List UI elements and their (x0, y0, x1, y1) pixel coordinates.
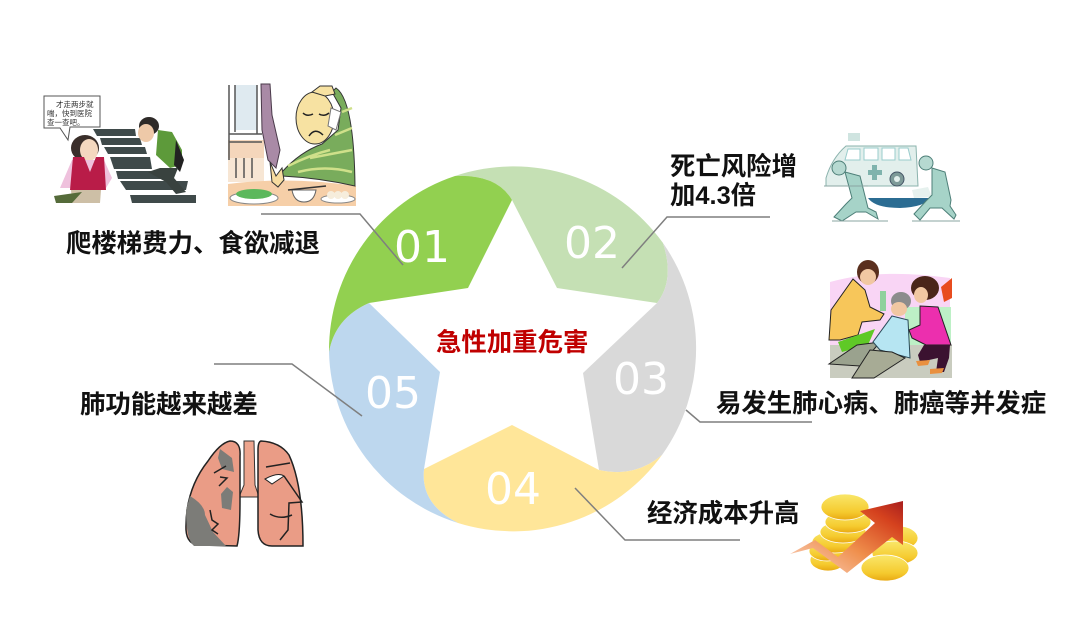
label 04: 经济成本升高 (647, 500, 799, 528)
leader line 05 (214, 364, 362, 416)
curtain (261, 84, 280, 168)
panel: star ring diagram (329, 166, 696, 531)
segment 01 green (329, 176, 512, 352)
segment 03 grey (583, 243, 696, 472)
leader line 01 (261, 214, 403, 265)
icon: woman and man on stairs (44, 96, 196, 203)
right medic (914, 168, 956, 220)
speech bubble: 查一查吧。 (47, 117, 84, 128)
head (296, 92, 334, 144)
ambulance (826, 146, 918, 186)
right lung (258, 441, 303, 546)
label 02: 死亡风险增 (670, 153, 797, 181)
stairs (93, 129, 196, 203)
hand on head (312, 86, 335, 96)
window and wall (235, 85, 257, 130)
sweater (282, 88, 355, 186)
number 04: 04 (485, 464, 541, 515)
segment 05 blue (329, 303, 458, 523)
backdrop pink (830, 274, 950, 350)
speech bubble: 喘，快到医院 (47, 108, 92, 119)
ground lines (824, 186, 960, 221)
soot patches (186, 449, 234, 546)
raised hand (270, 162, 284, 187)
leader line 03 (686, 410, 812, 422)
coin stacks (809, 494, 918, 581)
woman (54, 135, 112, 203)
center title: 急性加重危害 (436, 329, 588, 357)
woman in pink (911, 276, 939, 300)
icon: family helping fallen elder (829, 260, 952, 378)
speech bubble (44, 96, 100, 140)
trachea (239, 441, 259, 497)
segment 02 light green (455, 166, 668, 303)
plate of eggs (321, 191, 355, 203)
label 03: 易发生肺心病、肺癌等并发症 (716, 389, 1046, 418)
number 02: 02 (564, 218, 620, 269)
stretcher with patient (868, 198, 930, 208)
ground (830, 345, 952, 378)
man in yellow (829, 279, 884, 340)
plate of greens (230, 189, 278, 204)
number 05: 05 (365, 368, 421, 419)
number 01: 01 (394, 222, 450, 273)
leader line 04 (575, 488, 740, 540)
leader line 02 (622, 217, 770, 268)
label 01: 爬楼梯费力、食欲减退 (66, 229, 320, 258)
icon: ambulance and stretcher (824, 133, 960, 221)
table (228, 180, 356, 206)
segment 04 yellow (424, 425, 662, 531)
right face (265, 475, 284, 484)
label 02: 加4.3倍 (670, 182, 756, 210)
speech bubble: 才走两步就 (56, 99, 94, 110)
left face (210, 466, 227, 534)
elder (891, 292, 911, 310)
left lung (186, 441, 240, 546)
icon: healthy and smoker lungs (186, 441, 303, 546)
white hair (328, 108, 341, 130)
face (303, 113, 329, 136)
man (138, 117, 186, 194)
label 05: 肺功能越来越差 (80, 391, 258, 419)
icon: old man refusing food (228, 84, 356, 206)
rice bowl (292, 190, 316, 202)
flower (941, 278, 952, 302)
icon: coins with rising arrow (790, 494, 918, 581)
left medic (834, 172, 878, 221)
number 03: 03 (613, 354, 669, 405)
rising arrow (790, 501, 903, 573)
